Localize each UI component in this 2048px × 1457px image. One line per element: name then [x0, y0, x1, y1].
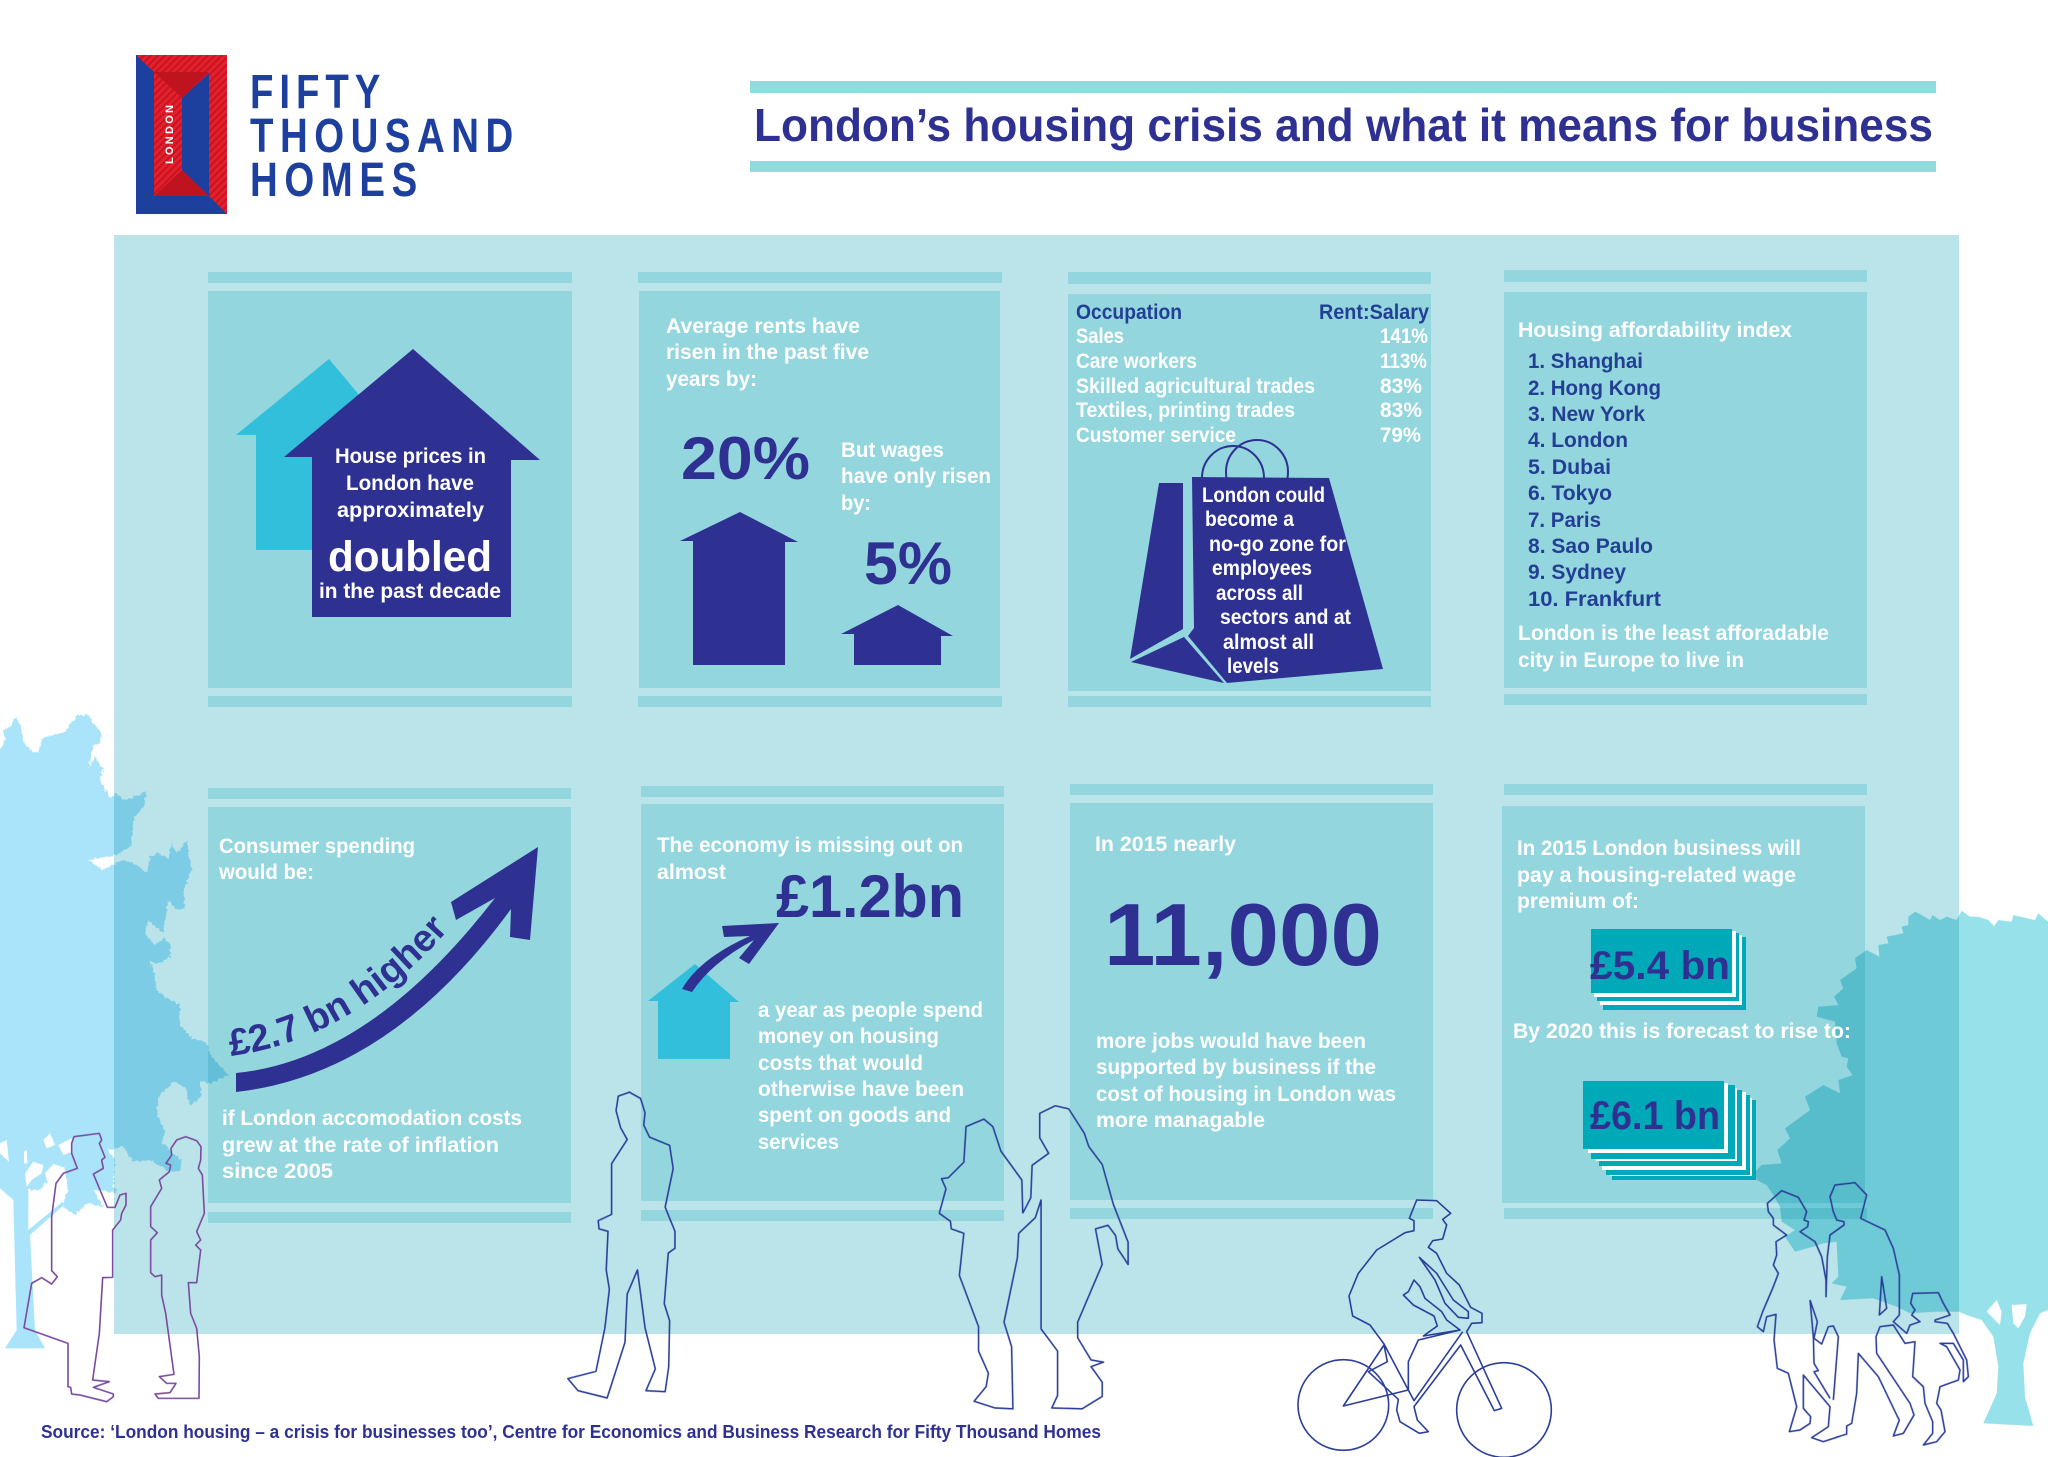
title: London’s housing crisis and what it means for business	[754, 99, 1933, 151]
people: family	[1757, 1183, 1968, 1445]
consumer text bottom	[222, 1107, 522, 1183]
table rows: 141%	[1380, 325, 1428, 348]
panel: housing affordability index	[1504, 292, 1867, 688]
bag text: sectors and at	[1220, 606, 1351, 629]
wages text	[841, 439, 991, 515]
index conclusion: city in Europe to live in	[1518, 649, 1744, 672]
table rows: Care workers	[1076, 350, 1197, 373]
jobs text: more managable	[1096, 1109, 1265, 1132]
bag text: almost all	[1223, 631, 1314, 654]
rents text: years by:	[666, 368, 757, 391]
panel backgrounds	[208, 270, 1867, 1223]
index list	[1528, 350, 1661, 611]
panel: rents and wages	[639, 291, 1000, 688]
index list: 9. Sydney	[1528, 561, 1626, 584]
house prices text: House prices in	[335, 445, 486, 468]
index heading: Housing affordability index	[1518, 319, 1792, 342]
logo: HOMES	[250, 154, 417, 207]
panel: consumer spending	[218, 835, 538, 1183]
bag text	[1202, 484, 1351, 678]
rents text: Average rents have	[666, 315, 860, 338]
wages text: have only risen	[841, 465, 991, 488]
house prices text	[319, 445, 501, 603]
premium text: pay a housing-related wage	[1517, 864, 1796, 887]
icon: banknote stack 2015	[1591, 929, 1746, 1010]
index list: 6. Tokyo	[1528, 482, 1612, 505]
consumer text bottom: since 2005	[222, 1160, 333, 1183]
jobs text: cost of housing in London was	[1096, 1083, 1396, 1106]
index list: 1. Shanghai	[1528, 350, 1643, 373]
table header: Occupation	[1076, 301, 1182, 324]
icon: back house	[236, 359, 422, 550]
icon: cyan house	[648, 964, 739, 1059]
stat: 11,000: 11,000	[1104, 885, 1382, 984]
wages text: But wages	[841, 439, 944, 462]
people: two women	[939, 1106, 1128, 1409]
bag text: employees	[1212, 557, 1312, 580]
economy text top: almost	[657, 861, 726, 884]
consumer text bottom: grew at the rate of inflation	[222, 1134, 499, 1157]
icon: tall house	[680, 512, 798, 665]
house prices text: London have	[346, 472, 474, 495]
person: cyclist	[1298, 1200, 1551, 1457]
economy text bottom: services	[758, 1131, 839, 1154]
bag text: London could	[1202, 484, 1325, 507]
stat: 20%: 20%	[681, 425, 810, 492]
icon: banknote stack 2020	[1583, 1081, 1756, 1180]
arrow: from house	[682, 923, 779, 992]
panel: wage premium	[1502, 806, 1867, 1203]
index list: 8. Sao Paulo	[1528, 535, 1653, 558]
stat: 5%: 5%	[864, 530, 952, 597]
premium text: premium of:	[1517, 890, 1639, 913]
title	[750, 81, 1936, 172]
person: walking man	[568, 1092, 675, 1398]
index list: 4. London	[1528, 429, 1628, 452]
house prices text: in the past decade	[319, 580, 501, 603]
curved label: £2.7 bn higher	[229, 916, 444, 1056]
consumer text top: would be:	[218, 861, 314, 884]
logo	[136, 55, 513, 214]
jobs text: supported by business if the	[1096, 1056, 1376, 1079]
economy text bottom: otherwise have been	[758, 1078, 964, 1101]
table rows: 83%	[1380, 399, 1422, 422]
consumer text bottom: if London accomodation costs	[222, 1107, 522, 1130]
stat: 5.4 bn: £5.4 bn	[1590, 944, 1730, 988]
index list: 10. Frankfurt	[1528, 588, 1661, 611]
icon: shopping bag	[1130, 440, 1383, 683]
bag text: levels	[1227, 655, 1279, 678]
index list: 3. New York	[1528, 403, 1645, 426]
rents text	[666, 315, 869, 391]
stat: 6.1 bn: £6.1 bn	[1590, 1094, 1720, 1138]
forecast text: By 2020 this is forecast to rise to:	[1513, 1020, 1851, 1043]
tree: right	[1755, 911, 2048, 1426]
economy text top: The economy is missing out on	[657, 834, 963, 857]
bag text: no-go zone for	[1209, 533, 1346, 556]
economy text bottom: spent on goods and	[758, 1104, 951, 1127]
jobs intro: In 2015 nearly	[1095, 833, 1236, 856]
house prices text: doubled	[328, 533, 492, 581]
economy text bottom: costs that would	[758, 1052, 923, 1075]
table rows: 79%	[1380, 424, 1421, 447]
wages text: by:	[841, 492, 871, 515]
index list: 7. Paris	[1528, 509, 1601, 532]
index list: 2. Hong Kong	[1528, 377, 1661, 400]
bag text: become a	[1205, 508, 1294, 531]
table header: Rent:Salary	[1319, 301, 1429, 324]
economy text top	[657, 834, 963, 884]
premium text	[1517, 837, 1801, 913]
economy text bottom	[758, 999, 983, 1154]
jobs text: more jobs would have been	[1096, 1030, 1366, 1053]
logo: FIFTY	[250, 66, 380, 119]
index conclusion: London is the least afforadable	[1518, 622, 1829, 645]
rents text: risen in the past five	[666, 341, 869, 364]
table rows: 83%	[1380, 375, 1422, 398]
stat: 1.2bn: £1.2bn	[776, 863, 964, 930]
source note: Source: ‘London housing – a crisis for businesses too’, Centre for Economics and Business Research for Fifty Thousand Homes	[41, 1422, 1101, 1442]
panel: house prices	[208, 291, 572, 688]
table rows: Skilled agricultural trades	[1076, 375, 1315, 398]
index conclusion	[1518, 622, 1829, 672]
people: two men talking	[24, 1133, 204, 1402]
panel: economy missing out	[641, 804, 1004, 1201]
panel: occupation table	[1068, 294, 1431, 691]
table rows	[1076, 325, 1428, 447]
icon: front house	[284, 349, 540, 617]
index list: 5. Dubai	[1528, 456, 1611, 479]
logo: THOUSAND	[250, 110, 513, 163]
icon: small house	[841, 605, 953, 665]
logo: LONDON	[164, 105, 176, 164]
economy text bottom: money on housing	[758, 1025, 939, 1048]
house prices text: approximately	[337, 499, 484, 522]
table rows: 113%	[1380, 350, 1427, 373]
arrow: rising curve	[236, 847, 538, 1092]
consumer text top	[218, 835, 415, 884]
bag text: across all	[1216, 582, 1303, 605]
jobs text	[1096, 1030, 1396, 1132]
table rows: Customer service	[1076, 424, 1236, 447]
economy text bottom: a year as people spend	[758, 999, 983, 1022]
premium text: In 2015 London business will	[1517, 837, 1801, 860]
consumer text top: Consumer spending	[219, 835, 415, 858]
table rows: Textiles, printing trades	[1076, 399, 1295, 422]
tree: left	[0, 715, 228, 1348]
background panel	[114, 235, 1959, 1334]
panel: jobs	[1070, 803, 1433, 1200]
table rows: Sales	[1076, 325, 1124, 348]
table header	[1076, 301, 1429, 324]
